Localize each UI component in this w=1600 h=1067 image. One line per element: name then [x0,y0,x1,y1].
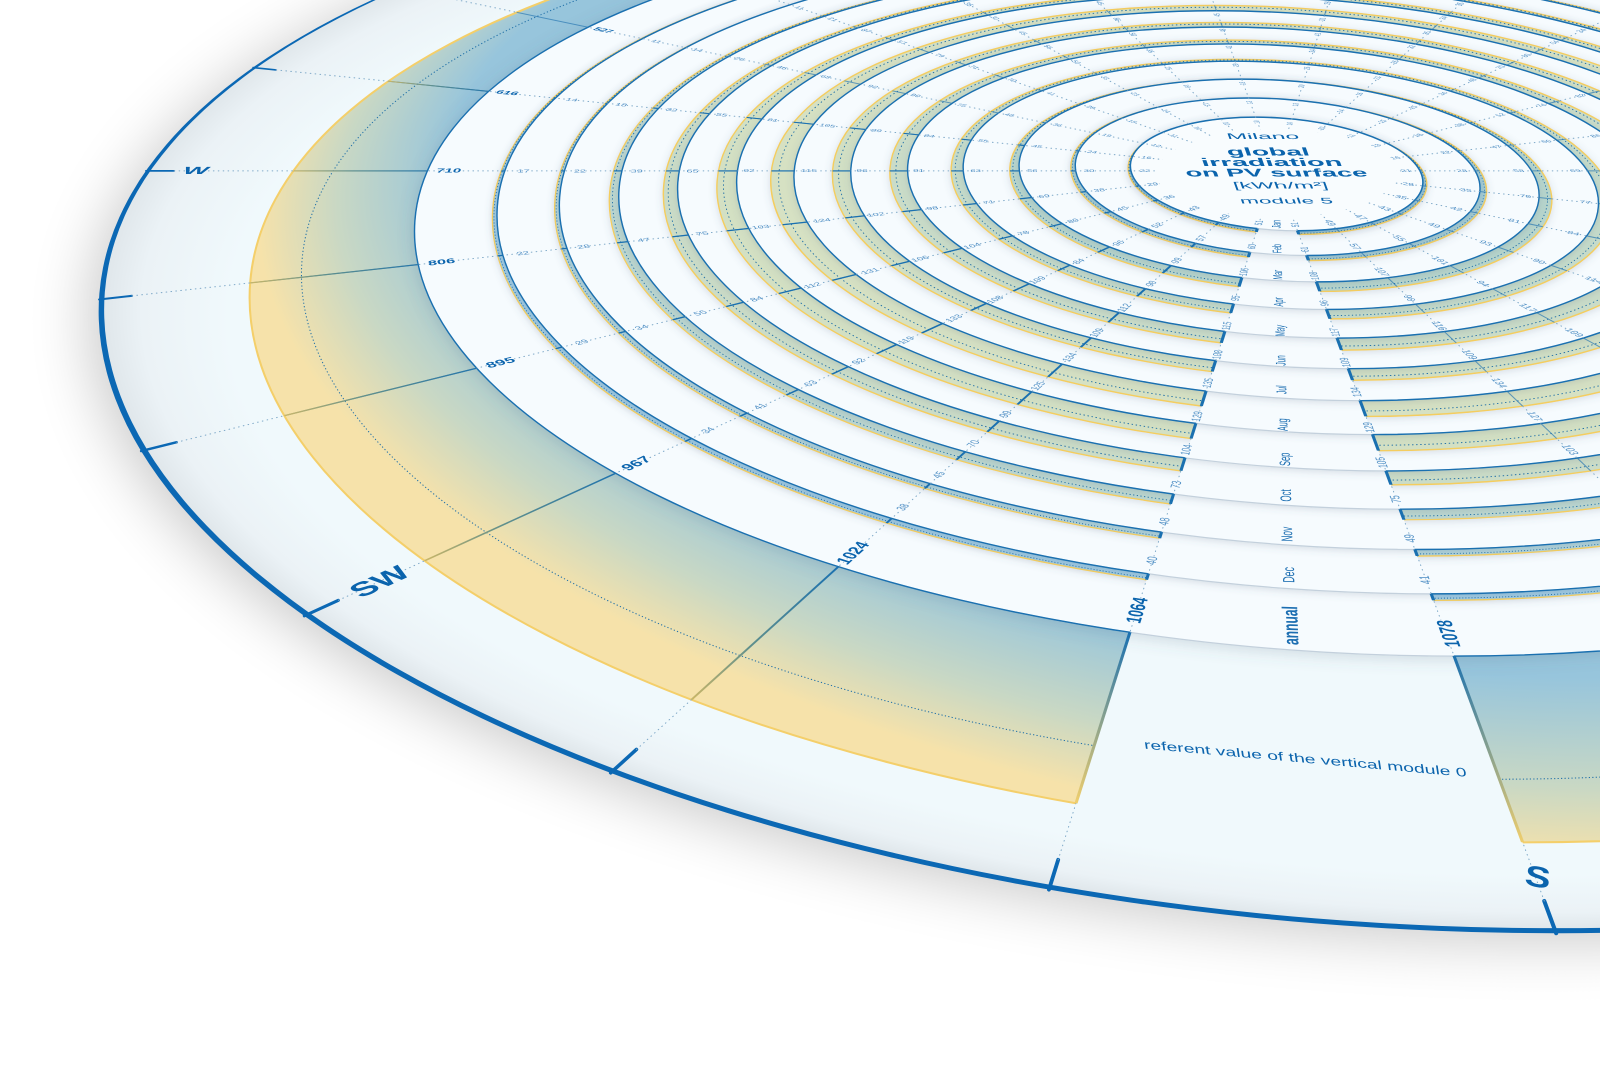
values: spoke NW: 41 [1044,92,1058,96]
values: spoke 15 deg east of N: 28 [1323,1,1334,5]
values: spoke 15 deg north of W: 32 [664,107,680,113]
values: spoke 30 deg west of N: 10 [1191,126,1204,131]
values: spoke W: 56 [1027,169,1038,173]
May disc [898,21,1600,361]
values: spoke 75 deg south of W: 48 [1156,517,1174,526]
March band [1006,78,1555,296]
values: spoke 15 deg north of W: 55 [714,112,730,118]
values: spoke S: 49 [1402,534,1420,542]
values: spoke 30 deg north of E: 18 [1412,133,1426,138]
November band [534,0,1600,605]
values: spoke SW: 34 [699,426,719,435]
values: spoke 15 deg south of W: 124 [812,217,833,224]
compass direction labels: W [180,165,213,177]
values: spoke 75 deg south of W: 108 [1210,349,1225,360]
month labels column [1270,220,1303,645]
month labels column: Nov [1278,526,1296,542]
values: spoke 30 deg south of E [1394,194,1581,237]
values: spoke N: 42 [1225,46,1235,49]
values: spoke 30 deg north of W: 12 [1149,144,1163,148]
values: spoke 75 deg south of W: 73 [1168,480,1185,489]
values: spoke 30 deg east of S: 47 [1352,213,1370,221]
values: spoke 30 deg south of W: 112 [802,281,824,290]
values: spoke 30 deg west of N: 30 [987,16,1001,20]
values: spoke E: 58 [1512,169,1526,173]
June band [829,20,1600,385]
values: spoke 30 deg south of W: 131 [859,267,882,275]
values: spoke NE: 54 [1549,40,1562,45]
values: spoke W: 91 [913,169,924,173]
values: spoke 15 deg south of E: 77 [1579,199,1592,205]
values: spoke 30 deg east of S: 109 [1561,327,1586,338]
values: spoke 60 deg south of W: 1024 [832,540,874,567]
values: spoke W: 115 [801,169,817,173]
values: spoke SE: 43 [1376,205,1394,212]
values: spoke 15 deg north of W: 45 [1031,145,1043,149]
values: spoke SW: 108 [984,294,1006,305]
January central disc [1127,108,1427,240]
values: spoke 15 deg east of S: 127 [1523,411,1545,422]
values: spoke 60 deg south of W [832,213,1233,567]
values: spoke 15 deg east of N: 31 [1318,17,1328,21]
values: spoke W: 30 [1084,169,1095,173]
month labels column: Jan [1270,220,1285,229]
values: spoke SE [1376,205,1600,285]
values: spoke 15 deg west of N: 50 [1126,33,1138,37]
values: spoke 75 deg south of W: 60 [1244,243,1259,250]
values: spoke 30 deg north of W: 527 [590,26,616,34]
values: spoke N: 45 [1213,13,1223,17]
values: spoke E: 69 [1568,169,1583,173]
November disc [539,0,1600,598]
values: spoke 15 deg north of E: 60 [1539,139,1554,144]
values: spoke 30 deg east of N: 32 [1406,45,1419,49]
values: spoke 30 deg east of N: 14 [1335,109,1348,113]
values: spoke 30 deg east of S: 94 [1474,280,1492,287]
values: spoke 30 deg south of W: 106 [909,254,932,263]
values: spoke 75 deg south of W: 51 [1253,220,1266,226]
values: spoke 15 deg south of W: 71 [982,199,996,205]
values: spoke 15 deg west of N: 19 [1180,84,1193,88]
values: spoke SE: 90 [1530,257,1548,265]
values: spoke 75 deg south of W: 115 [1219,321,1234,331]
values: spoke S: 96 [1317,300,1332,306]
month labels column: Dec [1279,566,1298,583]
values: spoke 30 deg north of E: 74 [1533,103,1549,108]
values: spoke 60 deg south of W: 112 [1114,303,1134,313]
values: spoke 15 deg north of E: 47 [1489,144,1504,149]
note: referent value: referent value of the vertical module 0 [1143,737,1468,780]
values: spoke 15 deg west of N: 35 [1143,49,1156,53]
values: spoke 15 deg south of W: 806 [427,257,456,267]
values: spoke 30 deg east of N: 34 [1438,16,1451,20]
values: spoke 15 deg north of W: 616 [493,90,521,97]
values: spoke 60 deg south of W: 134 [1060,352,1080,363]
values: spoke 30 deg south of E: 81 [1507,217,1522,225]
values: spoke 30 deg east of S: 101 [1429,255,1452,266]
values: spoke 30 deg south of W: 45 [1114,205,1131,212]
compass direction labels [180,165,1552,896]
values: spoke 30 deg north of E: 52 [1494,113,1508,118]
values: spoke NW: 70 [1005,78,1019,83]
values: spoke 15 deg east of S: 57 [1346,243,1364,250]
values: spoke E: 21 [1399,169,1413,173]
values: spoke S: 129 [1361,422,1379,432]
values: spoke 15 deg north of W: 84 [922,133,936,139]
values: spoke 15 deg east of N: 13 [1291,103,1302,107]
values: spoke 15 deg south of E: 28 [1402,181,1415,187]
compass direction labels: SW [341,561,418,602]
values: spoke 15 deg west of N: 45 [1093,1,1105,5]
values: spoke SW: 119 [895,335,917,345]
values: spoke W: 17 [517,168,530,173]
values: spoke 15 deg north of W [493,90,1152,160]
month labels column: May [1273,324,1289,337]
values: spoke SW: 96 [1109,239,1127,247]
August band [702,0,1600,487]
values: spoke 30 deg north of E: 82 [1572,93,1588,98]
values: spoke 30 deg south of E: 84 [1566,230,1581,237]
values: spoke 15 deg west of N [1093,1,1232,126]
values: spoke 30 deg east of N: 16 [1354,92,1366,96]
values: spoke 15 deg north of W: 81 [766,117,780,123]
values: spoke 15 deg west of N: 56 [1110,17,1123,22]
values: spoke 30 deg north of W: 75 [954,103,969,108]
December band [469,0,1600,654]
values: spoke 30 deg south of W: 104 [961,241,984,250]
values: spoke 15 deg south of W: 69 [1037,193,1051,199]
values: spoke W: 92 [743,169,755,173]
values: spoke W: 65 [686,168,699,173]
values: spoke 30 deg west of N: 56 [1041,45,1054,49]
values: spoke S: 75 [1387,495,1405,503]
values: spoke NE: 34 [1437,91,1450,96]
values: spoke W: 39 [630,168,643,173]
values: spoke 15 deg south of W: 38 [1092,187,1106,193]
values: spoke 30 deg west of N: 14 [1159,109,1172,114]
values: spoke 15 deg east of S: 116 [1428,321,1449,331]
values: spoke S: 61 [1297,247,1312,252]
values: spoke NW: 79 [932,53,946,58]
values: spoke NW: 28 [1084,105,1097,110]
values: spoke 30 deg north of W: 68 [818,74,833,80]
values: spoke 30 deg south of E: 42 [1449,205,1464,212]
values: spoke NE [1346,28,1590,138]
values: spoke S: 41 [1417,576,1435,584]
values: spoke 15 deg north of E [1388,133,1600,160]
values: spoke 30 deg north of W: 36 [1050,123,1064,128]
values: spoke SW: 52 [1148,221,1166,229]
values: spoke 15 deg east of S: 49 [1321,219,1339,226]
values: spoke 15 deg west of N: 13 [1200,103,1212,107]
title block: module 5 [1238,196,1334,205]
values: spoke 15 deg west of N: 10 [1220,122,1232,126]
values: spoke 15 deg north of E: 16 [1388,155,1403,160]
values: spoke SW: 63 [801,379,821,388]
values: spoke SE: 49 [1425,221,1443,229]
values: spoke NE: 11 [1346,134,1359,138]
values: spoke S: 1078 [1431,620,1466,647]
values: spoke 60 deg south of W: 45 [930,470,949,479]
values: spoke 15 deg south of W [427,181,1159,267]
December disc [474,0,1600,647]
values: spoke 15 deg south of W: 102 [866,211,886,218]
values: spoke 30 deg south of W [483,194,1178,370]
values: spoke NE: 15 [1376,119,1390,124]
dotted radial guides [132,0,1600,901]
February band [1068,96,1490,266]
values: spoke 15 deg south of W: 75 [694,230,710,237]
values: spoke 30 deg south of W: 84 [748,295,766,303]
values: spoke 30 deg north of W: 46 [774,65,790,71]
values: spoke 15 deg east of N [1285,1,1334,126]
October band [590,0,1600,564]
values: spoke 30 deg east of N: 26 [1390,60,1402,65]
values: spoke S: 105 [1374,457,1392,468]
values: spoke 30 deg east of N [1316,2,1467,131]
values: spoke 60 deg south of W: 38 [894,503,914,512]
values: spoke 75 deg south of W: 106 [1236,267,1251,276]
values: spoke NE: 70 [1494,65,1508,70]
values: spoke S: 108 [1306,272,1322,280]
values: spoke 30 deg east of S [1352,213,1586,338]
values: spoke W: 22 [1139,169,1150,173]
values: spoke SW: 84 [1070,257,1088,265]
values: spoke 30 deg east of N: 10 [1316,126,1329,131]
values: spoke 60 deg south of W: 99 [1168,256,1185,264]
values: spoke 30 deg east of N: 21 [1372,76,1384,80]
values: spoke N: 48 [1218,29,1229,32]
values: spoke 15 deg east of S: 103 [1557,444,1581,456]
values: spoke 15 deg east of N: 41 [1313,32,1324,37]
values: spoke 30 deg west of N: 50 [1069,60,1082,65]
values: spoke NE: 25 [1407,105,1421,110]
title block: Milano [1225,131,1301,141]
values: spoke 15 deg east of N: 20 [1297,84,1307,88]
values: spoke 75 deg south of W: 1064 [1121,595,1153,625]
values: spoke N: 18 [1238,82,1248,85]
month labels column: Jun [1274,355,1290,366]
values: spoke 30 deg south of W: 55 [691,309,709,317]
values: spoke 15 deg east of N: 10 [1285,122,1296,126]
values: spoke 15 deg east of N: 34 [1308,49,1318,53]
values: spoke NE: 80 [1520,53,1534,58]
values: spoke NE: 34 [1573,28,1590,34]
values: spoke S [1289,222,1466,647]
April disc [955,42,1600,329]
values: spoke 30 deg east of S: 55 [1390,234,1409,242]
values: spoke NW: 11 [792,5,807,11]
month labels column: Oct [1277,489,1295,502]
values: spoke 30 deg north of E: 38 [1453,123,1467,128]
October disc [600,0,1600,553]
values: spoke SW: 109 [1026,275,1049,285]
values: spoke NW: 57 [894,40,908,45]
values: spoke SW: 967 [618,454,656,473]
values: spoke 15 deg north of W: 18 [614,102,629,108]
values: spoke N: 29 [1231,63,1242,67]
values: spoke SW: 92 [849,357,869,366]
values: spoke SW [618,204,1203,473]
values: spoke 30 deg east of N: 35 [1452,2,1467,7]
values: spoke S: 134 [1348,387,1366,397]
September band [646,0,1600,525]
month labels column: Mar [1272,269,1286,280]
values: spoke S: 51 [1289,222,1302,227]
values: spoke NW: 71 [967,65,981,70]
values: spoke 30 deg south of E: 35 [1394,194,1409,201]
title block: on PV surface [1183,167,1369,179]
values: spoke 75 deg south of W: 129 [1190,410,1207,422]
values: spoke E: 28 [1455,169,1469,173]
values: spoke NW [792,5,1180,138]
values: spoke S: 117 [1327,328,1343,336]
values: spoke SE: 93 [1477,239,1495,247]
values: spoke 30 deg south of W: 80 [1065,217,1082,224]
values: spoke W: 22 [574,168,587,173]
title block: global [1224,146,1312,158]
values: spoke 60 deg south of W: 99 [997,410,1016,419]
values: spoke 30 deg north of W: 80 [908,93,923,98]
values: spoke SW: 133 [943,313,965,323]
values: spoke 60 deg south of W: 109 [1087,327,1107,338]
values: spoke 30 deg north of W: 48 [1002,113,1016,118]
values: spoke 15 deg south of E: 70 [1519,193,1532,199]
annual disc [388,0,1600,716]
values: spoke W [435,168,1150,174]
values: spoke W: 710 [435,168,462,174]
values: spoke 15 deg south of W: 98 [925,205,940,211]
values: spoke 60 deg south of W: 125 [1028,380,1048,391]
March disc [1013,63,1546,298]
values: spoke 30 deg north of E [1370,93,1588,148]
title block [1183,131,1369,205]
compass ticks [99,68,1556,933]
values: spoke W: 63 [970,169,981,173]
values: spoke 15 deg south of W: 29 [1146,181,1159,187]
values: spoke 75 deg south of W [1121,220,1266,625]
values: spoke S: 109 [1337,358,1355,367]
month labels column: Aug [1276,418,1292,431]
values: spoke 75 deg south of W: 135 [1200,378,1217,389]
month labels column: annual [1277,606,1303,645]
values: spoke 15 deg north of W: 89 [870,128,883,133]
values: spoke 30 deg south of W: 29 [573,338,591,346]
values: spoke 30 deg west of N: 33 [1098,76,1111,80]
values: spoke 15 deg south of W: 103 [751,224,771,230]
annual irradiation gradient band [248,0,1600,844]
values: spoke 15 deg south of W: 22 [515,250,531,256]
values: spoke 30 deg south of W: 895 [483,355,518,370]
February disc [1070,86,1485,268]
values: spoke 30 deg south of W: 78 [1016,230,1032,237]
May band [886,38,1600,355]
values: spoke 30 deg east of S: 117 [1515,302,1539,313]
values: spoke 30 deg north of W [590,26,1163,148]
values: spoke 75 deg south of W: 104 [1179,444,1196,456]
values: spoke 15 deg east of S: 107 [1371,267,1392,277]
January band [1124,109,1430,243]
values: spoke E [1399,169,1583,173]
values: spoke 15 deg east of S: 98 [1401,295,1418,302]
values: spoke 15 deg north of W: 24 [1086,150,1098,155]
August disc [722,0,1600,469]
title block: irradiation [1199,156,1344,169]
month labels column: Sep [1276,452,1294,466]
values: spoke 15 deg north of W: 16 [1140,156,1152,160]
values: spoke 30 deg west of N: 23 [1128,92,1141,97]
values: spoke 15 deg east of S [1321,219,1581,456]
values: spoke 15 deg east of S: 134 [1487,378,1510,389]
title block: [kWh/m²] [1231,181,1330,191]
values: spoke 30 deg north of W: 26 [732,56,748,62]
values: spoke 15 deg south of W: 28 [576,243,591,250]
values: spoke 75 deg south of W: 40 [1144,556,1161,566]
values: spoke 30 deg south of W: 36 [1161,194,1178,201]
September disc [661,0,1600,510]
values: spoke 30 deg north of W: 11 [649,39,664,44]
values: spoke 15 deg south of E [1402,181,1592,205]
values: spoke 15 deg north of W: 14 [565,97,580,103]
values: spoke 30 deg north of E: 13 [1370,144,1384,148]
June disc [840,0,1600,396]
values: spoke 30 deg north of W: 19 [1100,133,1113,138]
April band [948,58,1600,324]
values: spoke 60 deg south of W: 49 [1216,213,1233,221]
month labels column: Jul [1275,385,1290,394]
values: spoke 15 deg north of E: 22 [1438,150,1453,155]
values: spoke 60 deg south of W: 90 [1143,280,1160,288]
compass direction labels: S [1523,859,1552,896]
values: spoke N: 10 [1252,120,1263,124]
values: spoke NE: 48 [1466,78,1480,83]
values: spoke NW: 37 [858,28,874,34]
values: spoke 15 deg south of E: 35 [1460,187,1473,193]
values: spoke 30 deg east of N: 35 [1422,31,1434,35]
values: spoke 30 deg north of W: 92 [865,84,880,89]
values: spoke 15 deg west of N: 25 [1162,66,1174,71]
values: spoke 30 deg west of N: 45 [1015,31,1029,36]
values: spoke NW: 21 [825,16,841,22]
values: spoke NW: 11 [1167,134,1180,138]
values: spoke W: 96 [856,169,868,173]
values: spoke 75 deg south of W: 95 [1228,295,1243,302]
July band [757,0,1600,449]
values: spoke 60 deg south of W: 70 [965,439,984,448]
values: spoke 15 deg east of S: 109 [1458,349,1480,360]
values: spoke 15 deg south of W: 47 [636,237,652,243]
values: spoke NW: 15 [1125,119,1139,124]
values: spoke 30 deg north of W: 14 [690,47,706,53]
values: spoke SW: 41 [751,402,771,411]
July disc [781,0,1600,431]
month labels column: Feb [1271,244,1285,254]
values: spoke 15 deg north of W: 105 [818,123,837,129]
month labels column: Apr [1272,297,1287,307]
solid band dividers [132,0,1600,901]
values: spoke 30 deg west of N: 35 [961,2,977,7]
values: spoke N [1213,13,1263,124]
values: spoke N: 13 [1245,101,1256,104]
values: spoke SW: 43 [1185,204,1203,212]
values: spoke 15 deg north of W: 55 [977,139,989,144]
values: spoke 60 deg south of W: 57 [1193,234,1210,242]
values: spoke 30 deg west of N [961,2,1204,131]
values: spoke 30 deg south of W: 34 [633,324,651,331]
values: spoke 15 deg east of N: 25 [1303,66,1313,70]
